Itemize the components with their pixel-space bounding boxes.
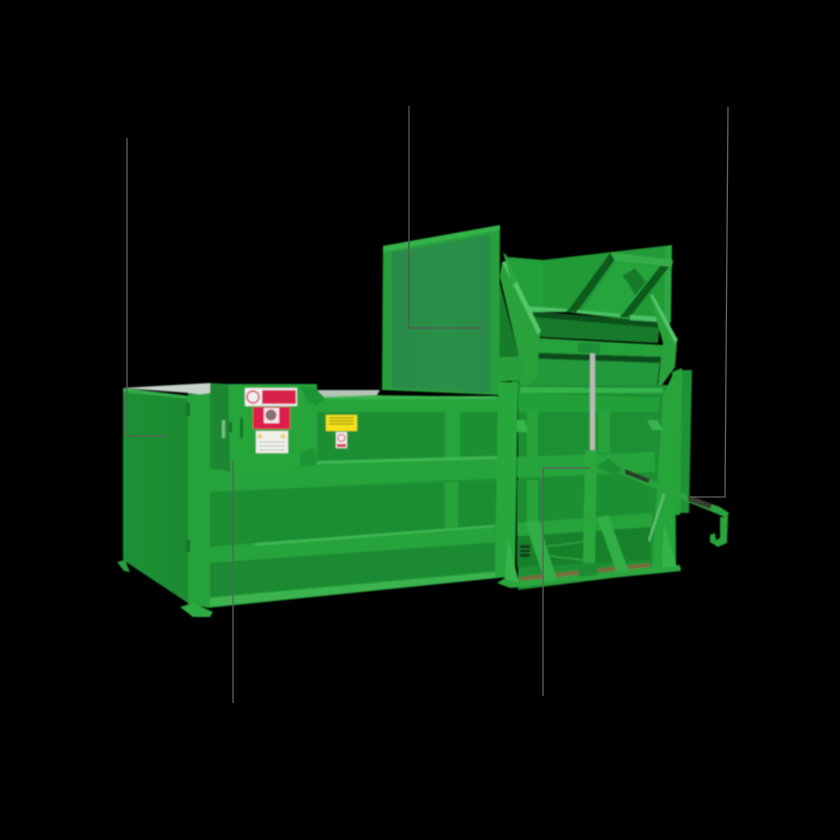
- corner post: [186, 393, 210, 608]
- loading door: [382, 225, 500, 395]
- callout line: base frame: [543, 468, 590, 696]
- lever arm and hook: [622, 461, 729, 547]
- callout line: lever arm: [690, 107, 728, 497]
- right post: [652, 370, 677, 567]
- hydraulic rod: [578, 343, 600, 450]
- hopper lip and throat: [520, 306, 663, 387]
- callout line: control box: [232, 461, 234, 703]
- callout line: end panel: [127, 138, 166, 436]
- callout line: loading door: [409, 106, 481, 328]
- bottom plate: [497, 563, 681, 588]
- support struts: [525, 493, 665, 582]
- front body: [188, 392, 498, 608]
- hopper back wall: [508, 245, 672, 325]
- feet: [117, 560, 213, 617]
- hopper side arms: [495, 252, 678, 392]
- end side panel: [123, 388, 190, 603]
- vent: [520, 545, 530, 557]
- warning signs on box: [245, 388, 297, 453]
- warning signs on body: [326, 415, 357, 448]
- central post and hinge: [547, 450, 623, 577]
- compactor machine: [117, 225, 729, 617]
- body right section: [517, 385, 675, 590]
- control box: [210, 383, 325, 472]
- silver top strip: [123, 383, 380, 397]
- rear hopper plate: [672, 368, 692, 515]
- hopper cross frame: [567, 252, 673, 317]
- main post: [493, 357, 663, 583]
